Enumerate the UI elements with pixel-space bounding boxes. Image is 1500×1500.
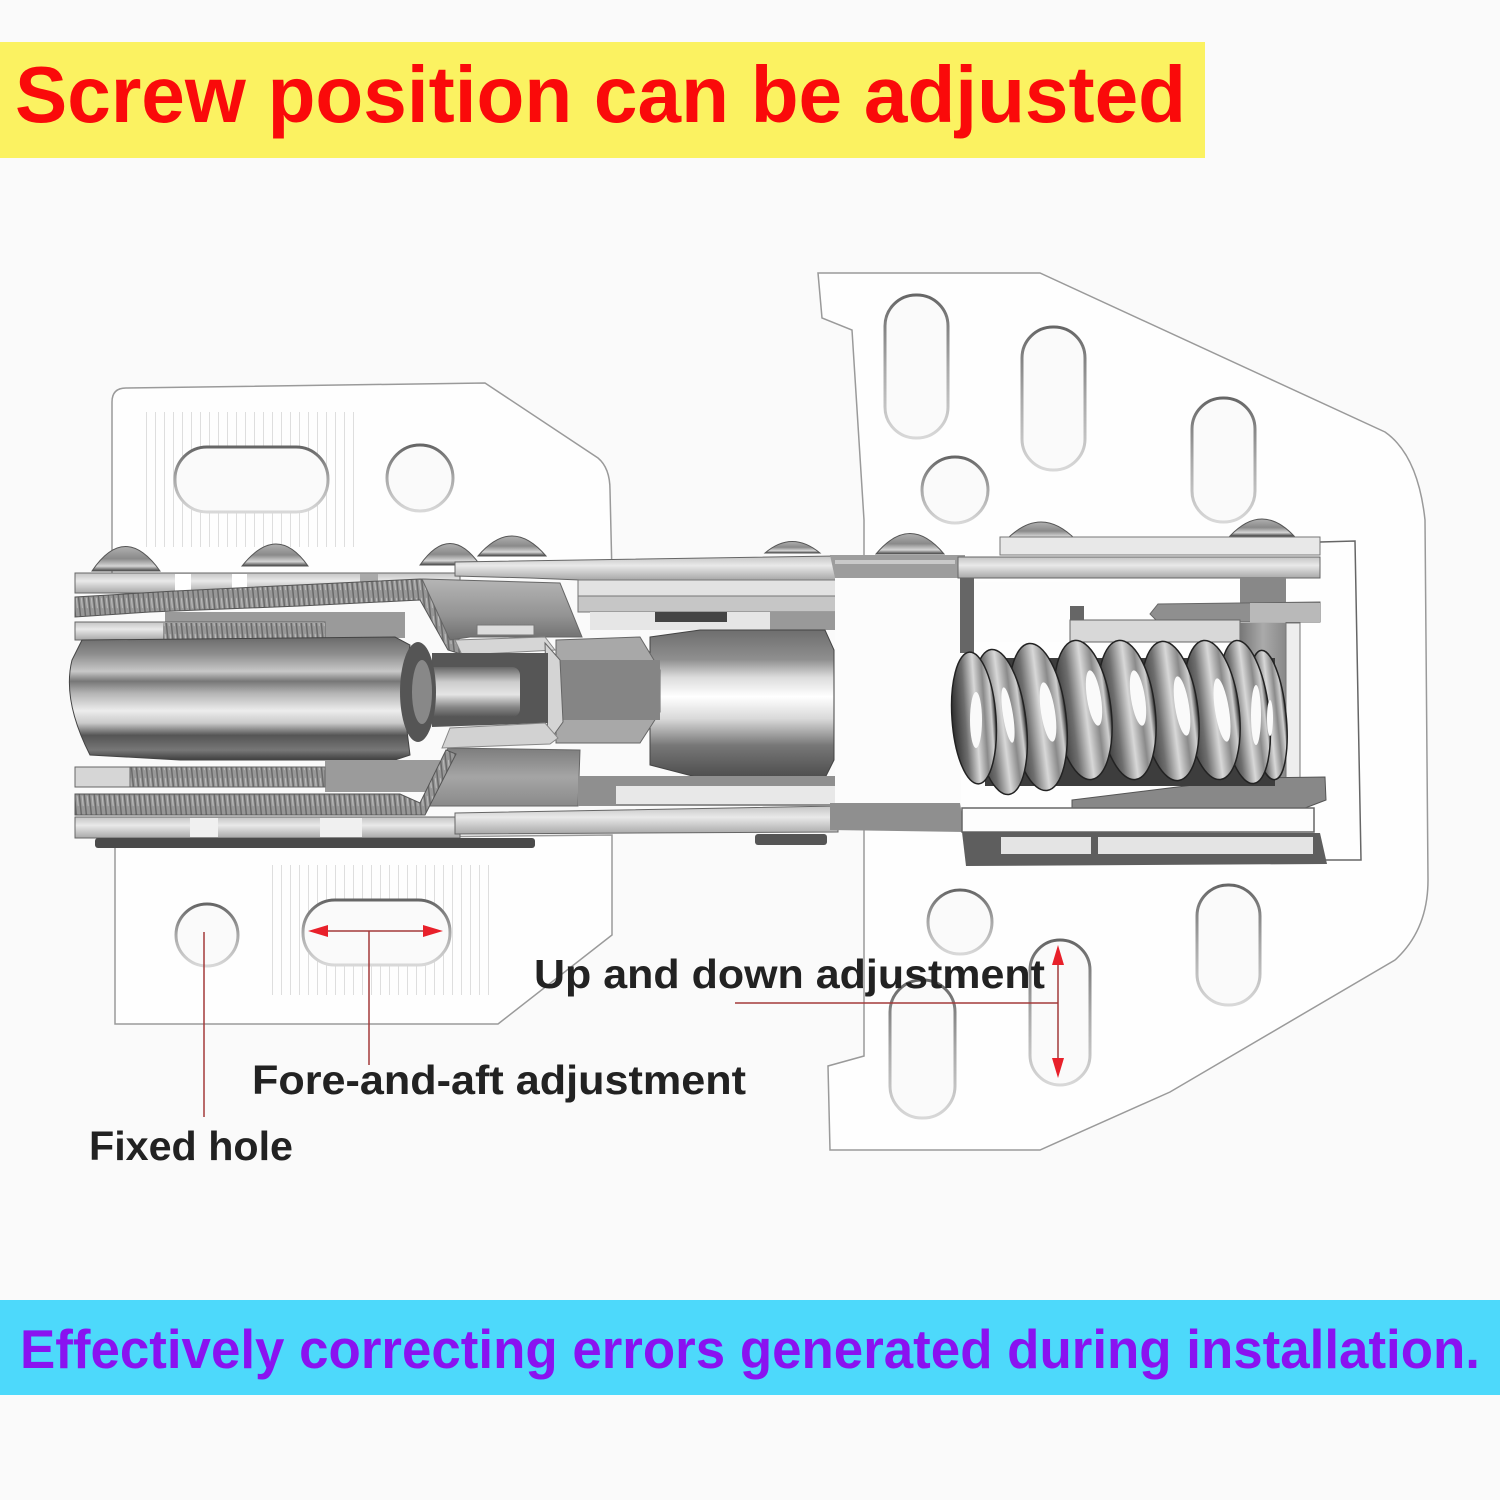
label: up and down: Up and down adjustment — [534, 951, 1045, 997]
upper bent block — [422, 579, 582, 640]
upper left round hole — [387, 445, 453, 511]
rivets — [92, 519, 1294, 571]
title: Screw position can be adjusted — [15, 50, 1186, 139]
hex nut — [545, 637, 660, 743]
left mounting plate: lower — [115, 835, 612, 1024]
left arm: lower layers — [75, 723, 580, 848]
annotation: up and down adjustment — [534, 945, 1064, 1078]
title banner — [0, 42, 1205, 158]
lower left slot — [303, 900, 450, 965]
right mounting plate — [818, 273, 1428, 1150]
long plate: lower middle — [455, 776, 838, 845]
left arm: upper layers — [75, 573, 582, 655]
upper slots and hole — [885, 295, 1255, 523]
center white block — [830, 555, 965, 832]
right arm: mechanism — [958, 537, 1327, 866]
upper left slot — [175, 447, 328, 512]
bottom banner — [0, 1300, 1500, 1395]
piston rod — [418, 667, 520, 717]
small barrel — [69, 637, 436, 760]
upper serrated edge — [75, 579, 464, 655]
long plate: upper middle — [455, 556, 838, 630]
arrow: horizontal double-headed — [308, 925, 443, 937]
lower slots and hole — [890, 885, 1260, 1118]
compression spring — [947, 637, 1293, 798]
outline tab behind spring — [1320, 541, 1361, 860]
coil highlights — [970, 669, 1273, 748]
arrow: vertical double-headed — [1052, 945, 1064, 1078]
lower serrated edge — [75, 750, 456, 815]
label: fixed hole: Fixed hole — [89, 1123, 293, 1169]
bottom caption: Effectively correcting errors generated during installation. — [20, 1318, 1480, 1380]
lower bent block — [420, 748, 580, 806]
large barrel — [650, 630, 834, 778]
coils — [947, 637, 1293, 798]
hinge illustration — [69, 273, 1428, 1150]
dark socket — [432, 653, 548, 727]
left mounting plate: upper — [112, 383, 612, 575]
fixed hole — [176, 904, 238, 966]
annotation: fore-and-aft adjustment — [252, 925, 746, 1103]
label: fore-and-aft: Fore-and-aft adjustment — [252, 1057, 746, 1103]
